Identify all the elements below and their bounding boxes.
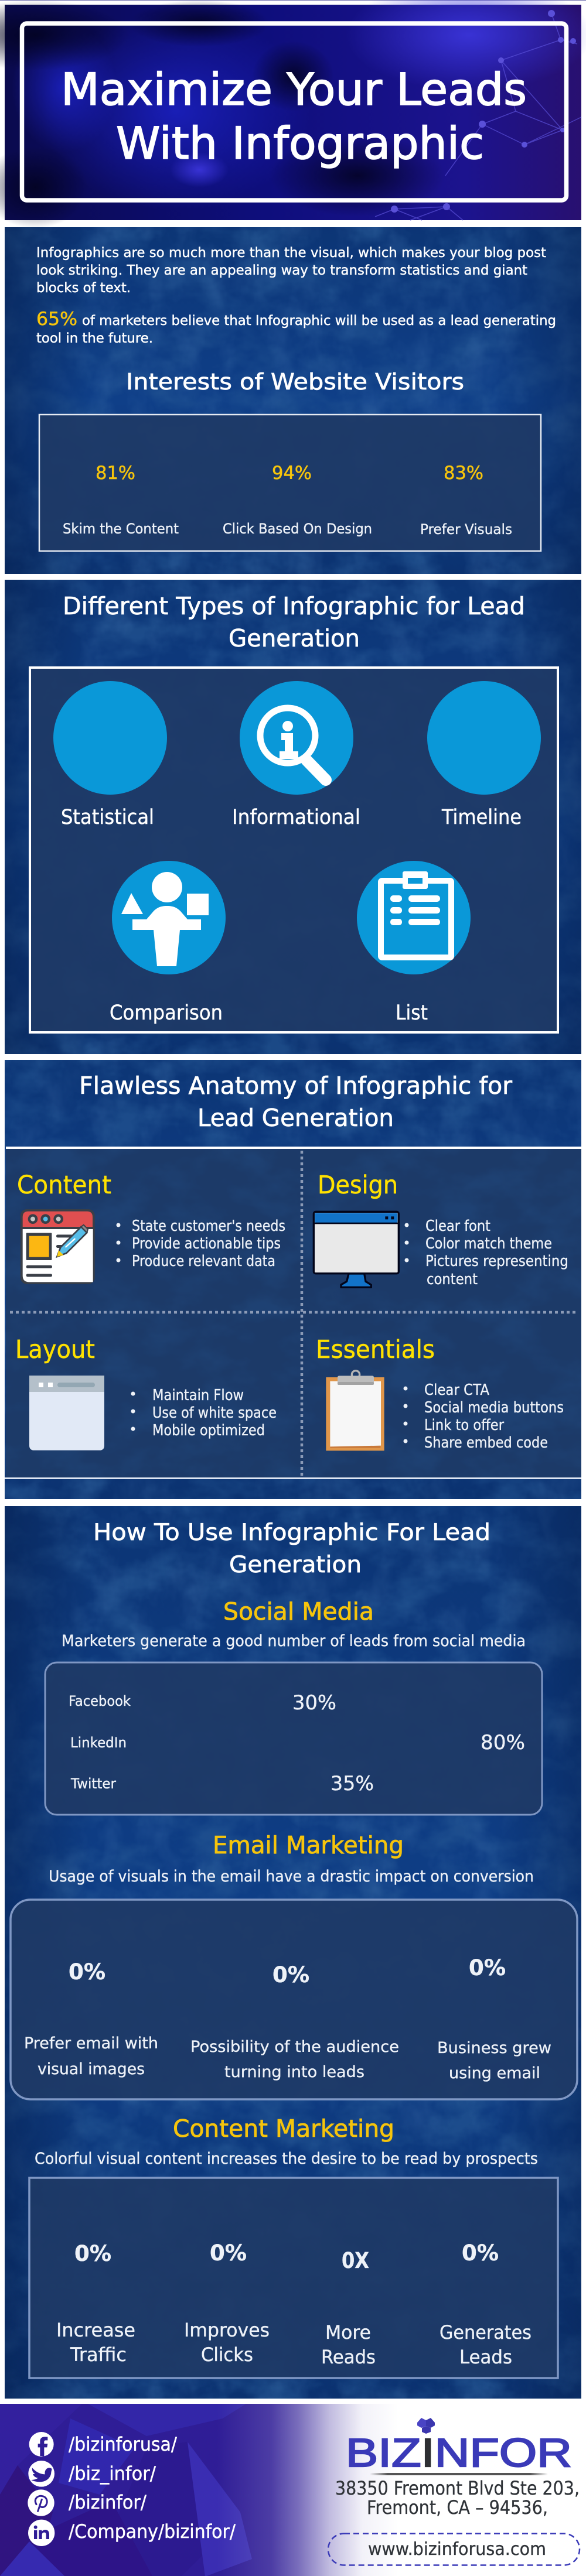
quadrant: layout: Layout [15,1335,95,1364]
email marketing box: Business grew [437,2039,551,2057]
section: email marketing: Usage of visuals in the email have a drastic impact on conversion [49,1867,534,1886]
stat: click based on design: Click Based On Design [223,521,372,537]
heading: different types: Generation [229,624,360,652]
social links [28,2432,236,2546]
social media box: 35% [331,1772,374,1795]
intro text: look striking. They are an appealing way to transform statistics and giant [36,263,527,278]
content marketing box: 0X [342,2248,369,2273]
email marketing box: using email [449,2064,540,2082]
heading: different types [63,592,525,652]
content marketing box: Leads [459,2346,512,2368]
website pill: www.bizinforusa.com [368,2539,546,2560]
bullet list: essentials: Link to offer [424,1417,504,1434]
social media box [45,1662,542,1815]
type: comparison: Comparison [110,1001,223,1025]
type: informational: Informational [232,806,360,829]
stat: skim the content: Skim the Content [63,521,179,537]
content marketing box: Generates [440,2321,532,2344]
website pill [328,2533,580,2565]
heading: how to use [93,1520,490,1578]
heading: interests of website visitors: Interests of Website Visitors [126,369,464,395]
bullet list: layout [131,1387,277,1439]
statistic: 65% of marketers [36,309,556,346]
stats box [39,415,541,551]
social links: /bizinfor/ [69,2491,146,2513]
bullet list: layout: Mobile optimized [152,1422,265,1439]
email marketing box: 0% [469,1955,506,1980]
stat: prefer visuals [420,463,512,538]
stat: prefer visuals: Prefer Visuals [420,521,512,538]
content marketing box: Improves [184,2319,270,2341]
bullet list: layout: Use of white space [152,1404,277,1422]
statistic: 65% of marketers: tool in the future. [36,331,153,346]
content marketing box: 0% [74,2241,111,2266]
icon: clipboard [326,1371,384,1451]
social media box: 30% [292,1691,336,1715]
heading: how to use: Generation [229,1552,362,1578]
heading: different types: Different Types of Infographic for Lead [63,592,525,620]
stat: skim the content [63,463,179,537]
type: timeline [427,681,541,829]
bullet list: essentials [403,1381,564,1452]
quadrant: content [17,1171,285,1284]
icon: logo cubes [417,2418,435,2434]
icon: pinterest [28,2489,54,2516]
content marketing box: Clicks [201,2344,253,2366]
statistic: 65% of marketers: of marketers believe that Infographic will be used as a lead generating [82,313,556,329]
quadrant: essentials: Essentials [316,1335,435,1364]
bullet list: content: Produce relevant data [132,1253,275,1270]
bullet list: design [404,1217,568,1288]
icon: browser window [29,1376,104,1451]
title: With Infographic [116,117,484,169]
title [61,63,527,169]
heading: how to use: How To Use Infographic For Lead [93,1520,490,1546]
email marketing box: Prefer email with [24,2034,158,2052]
stat: skim the content: 81% [96,463,135,484]
social media box: 80% [481,1731,525,1754]
bullet list: layout: Maintain Flow [152,1387,244,1404]
bullet list: essentials: Share embed code [424,1434,548,1452]
bullet list: content: Provide actionable tips [132,1235,281,1253]
logo: bizinfor: BIZ INFOR [346,2430,572,2475]
bullet list: content: State customer's needs [132,1217,285,1235]
social media box: Facebook [69,1693,131,1709]
content marketing box [29,2178,558,2378]
type: informational [232,681,360,829]
social media box: Twitter [70,1776,116,1792]
stat: click based on design: 94% [272,463,312,484]
panel: types of infographic [5,580,581,1054]
bullet list: design: Pictures representing [425,1253,568,1270]
section: email marketing: Email Marketing [213,1831,404,1859]
section: content marketing: Colorful visual content increases the desire to be read by prospects [35,2150,538,2168]
content marketing box: More [325,2321,371,2344]
section: social media [45,1597,542,1815]
type: list [357,861,471,1025]
section: email marketing [11,1831,577,2099]
content marketing box: 0% [462,2240,499,2266]
bullet list: design: Color match theme [425,1235,552,1253]
icon: twitter [28,2461,54,2487]
intro text [36,245,546,296]
icon: linkedin [28,2520,54,2546]
social links: /Company/bizinfor/ [69,2520,236,2543]
quadrant: design: Design [318,1171,398,1200]
email marketing box: 0% [69,1959,105,1985]
social links: /bizinforusa/ [69,2433,177,2455]
type: statistical [53,681,167,829]
intro text: blocks of text. [36,280,131,296]
title frame [22,23,566,200]
heading: flawless anatomy: Lead Generation [197,1104,394,1132]
social links: /biz_infor/ [69,2462,156,2485]
intro text: Infographics are so much more than the visual, which makes your blog post [36,245,546,261]
bullet list: design: content [427,1271,478,1288]
email marketing box [11,1900,577,2099]
section: content marketing [29,2115,558,2378]
bullet list: essentials: Social media buttons [424,1399,564,1417]
quadrant: essentials [316,1335,564,1452]
panel: how to use infographic [5,1506,581,2399]
heading: flawless anatomy: Flawless Anatomy of Infographic for [79,1072,512,1100]
panel: title header [0,0,586,228]
email marketing box: Possibility of the audience [190,2038,399,2056]
icon: facebook [29,2432,54,2457]
heading: flawless anatomy [79,1072,512,1132]
email marketing box: 0% [272,1962,309,1987]
icon: content editor [21,1209,95,1284]
social media box: LinkedIn [70,1735,127,1751]
type: list: List [396,1001,428,1025]
email marketing box: turning into leads [224,2063,364,2081]
email marketing box: visual images [38,2060,145,2078]
type: comparison [110,861,226,1025]
panel: flawless anatomy [5,1060,581,1499]
content marketing box: 0% [210,2240,247,2266]
panel: introduction and visitor interests [5,227,581,574]
section: social media: Social Media [223,1597,374,1626]
type: statistical: Statistical [61,806,154,829]
content marketing box: Traffic [70,2344,127,2366]
bullet list: design: Clear font [425,1217,490,1235]
content marketing box: Increase [56,2319,135,2341]
icon: monitor [314,1212,398,1287]
stat: prefer visuals: 83% [444,463,483,484]
types box [30,668,558,1032]
stat: click based on design [223,463,372,537]
icon: checklist clipboard [381,871,451,957]
address: Fremont, CA – 94536, [367,2496,548,2519]
icon: magnifier with i [260,708,326,780]
address [335,2477,580,2519]
quadrant: content: Content [17,1171,111,1200]
quadrant: layout [15,1335,277,1451]
title: Maximize Your Leads [61,63,527,115]
section: content marketing: Content Marketing [173,2115,394,2143]
panel: footer [0,2404,586,2576]
bullet list: content [116,1217,285,1270]
type: timeline: Timeline [441,806,522,829]
statistic: 65% of marketers: 65% [36,309,77,330]
quadrant: design [314,1171,568,1288]
icon: person with shapes [121,872,209,966]
content marketing box: Reads [321,2346,376,2368]
bullet list: essentials: Clear CTA [424,1381,489,1399]
section: social media: Marketers generate a good number of leads from social media [62,1632,526,1650]
